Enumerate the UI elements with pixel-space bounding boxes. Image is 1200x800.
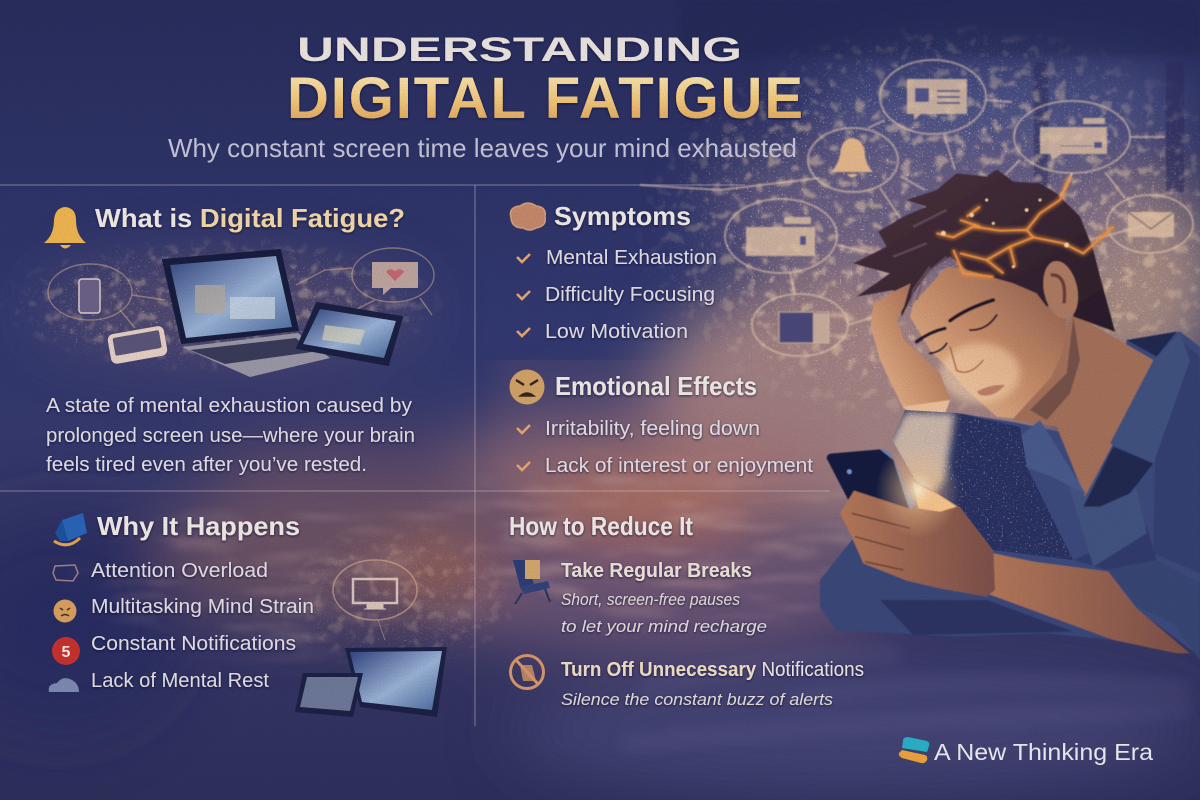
icon: open book <box>54 513 87 545</box>
tablets <box>295 647 447 717</box>
network bubbles: top right <box>640 60 1193 356</box>
panel: symptoms <box>510 201 717 343</box>
light beam and arm stars <box>892 410 1073 560</box>
under collar dark <box>1083 447 1153 507</box>
icon: scribble <box>53 565 78 581</box>
facial features <box>917 300 997 353</box>
hair <box>853 169 1115 332</box>
forearm <box>987 553 1190 653</box>
brand logo: A New Thinking Era <box>934 739 1153 765</box>
face <box>910 267 1067 418</box>
tip: regular breaks: to let your mind recharge <box>561 617 767 636</box>
title line 1: UNDERSTANDING <box>297 31 742 69</box>
cause list <box>49 560 314 692</box>
panel grid lines <box>0 185 830 726</box>
heading: Emotional Effects <box>555 371 757 401</box>
heading: What is Digital Fatigue? <box>95 203 405 233</box>
holding hand <box>840 485 995 597</box>
icon: bell bubble <box>831 138 873 178</box>
effects list: Lack of interest or enjoyment <box>545 455 813 477</box>
icon: brain <box>510 203 545 230</box>
icon: cloud <box>49 678 79 692</box>
panel: why it happens <box>49 511 447 717</box>
tip: regular breaks: Short, screen-free pauses <box>561 590 740 609</box>
effects list <box>517 418 813 477</box>
icon: chair <box>513 560 550 604</box>
raised hand <box>871 283 951 419</box>
symptom list: Difficulty Focusing <box>545 284 715 306</box>
phone <box>827 449 915 528</box>
icon: monitor bubble <box>333 560 417 640</box>
heading: Symptoms <box>554 201 691 231</box>
dark window frame <box>680 0 1200 192</box>
icon: browser bubble <box>1040 118 1107 160</box>
symptom list <box>517 247 717 343</box>
tip: notifications: Turn Off Unnecessary Notifications <box>561 659 864 681</box>
icon: notification badge <box>52 637 80 665</box>
icon: card bubble <box>907 79 967 120</box>
emotional effects tinted band <box>476 360 836 490</box>
ear <box>1038 258 1083 322</box>
title line 2: DIGITAL FATIGUE <box>287 66 803 131</box>
icon: phone <box>79 279 100 313</box>
description <box>46 395 415 476</box>
description: A state of mental exhaustion caused by <box>46 395 412 417</box>
icon: strained face <box>54 600 76 622</box>
bed folds <box>620 654 1190 745</box>
heading: How to Reduce It <box>509 511 693 541</box>
tip: regular breaks <box>561 560 767 636</box>
effects list: Irritability, feeling down <box>545 418 760 440</box>
cause list: Constant Notifications <box>91 633 296 655</box>
symptom list: Low Motivation <box>545 321 688 343</box>
heading: Why It Happens <box>97 511 300 541</box>
description: feels tired even after you’ve rested. <box>46 454 367 476</box>
torso <box>947 332 1200 657</box>
devices network <box>48 248 434 377</box>
icon: bell <box>44 207 86 248</box>
description: prolonged screen use—where your brain <box>46 425 415 447</box>
panel: emotional effects <box>510 370 813 477</box>
symptom list: Mental Exhaustion <box>546 247 717 269</box>
icon: heart message <box>372 262 418 295</box>
icon: notifications off <box>510 656 544 688</box>
collars <box>1020 420 1087 495</box>
panel: how to reduce it <box>509 511 864 709</box>
icon: notification badge: 5 <box>62 644 71 661</box>
tip: notifications <box>561 659 864 709</box>
left sleeve <box>820 530 1113 640</box>
icon: folder bubble <box>746 217 815 256</box>
icon: logo <box>899 737 929 763</box>
neck and chest <box>1013 313 1153 497</box>
tip: notifications: Silence the constant buzz of alerts <box>561 690 834 709</box>
brain network <box>937 177 1113 277</box>
icon: game device <box>107 325 168 365</box>
laptop <box>163 250 330 377</box>
tablet <box>297 303 402 365</box>
cause list: Multitasking Mind Strain <box>91 596 314 618</box>
icon: angry face <box>510 370 544 404</box>
cause list: Attention Overload <box>91 560 268 582</box>
brain sparks <box>941 199 1069 268</box>
person illustration <box>820 169 1200 660</box>
cause list: Lack of Mental Rest <box>91 670 269 692</box>
cuff <box>1107 560 1200 660</box>
subtitle: Why constant screen time leaves your mind exhausted <box>168 133 797 163</box>
title block <box>168 31 803 163</box>
panel: what is digital fatigue <box>44 203 434 476</box>
tip: regular breaks: Take Regular Breaks <box>561 560 752 582</box>
icon: mail bubble <box>1128 212 1174 237</box>
icon: window bubble <box>779 312 829 343</box>
